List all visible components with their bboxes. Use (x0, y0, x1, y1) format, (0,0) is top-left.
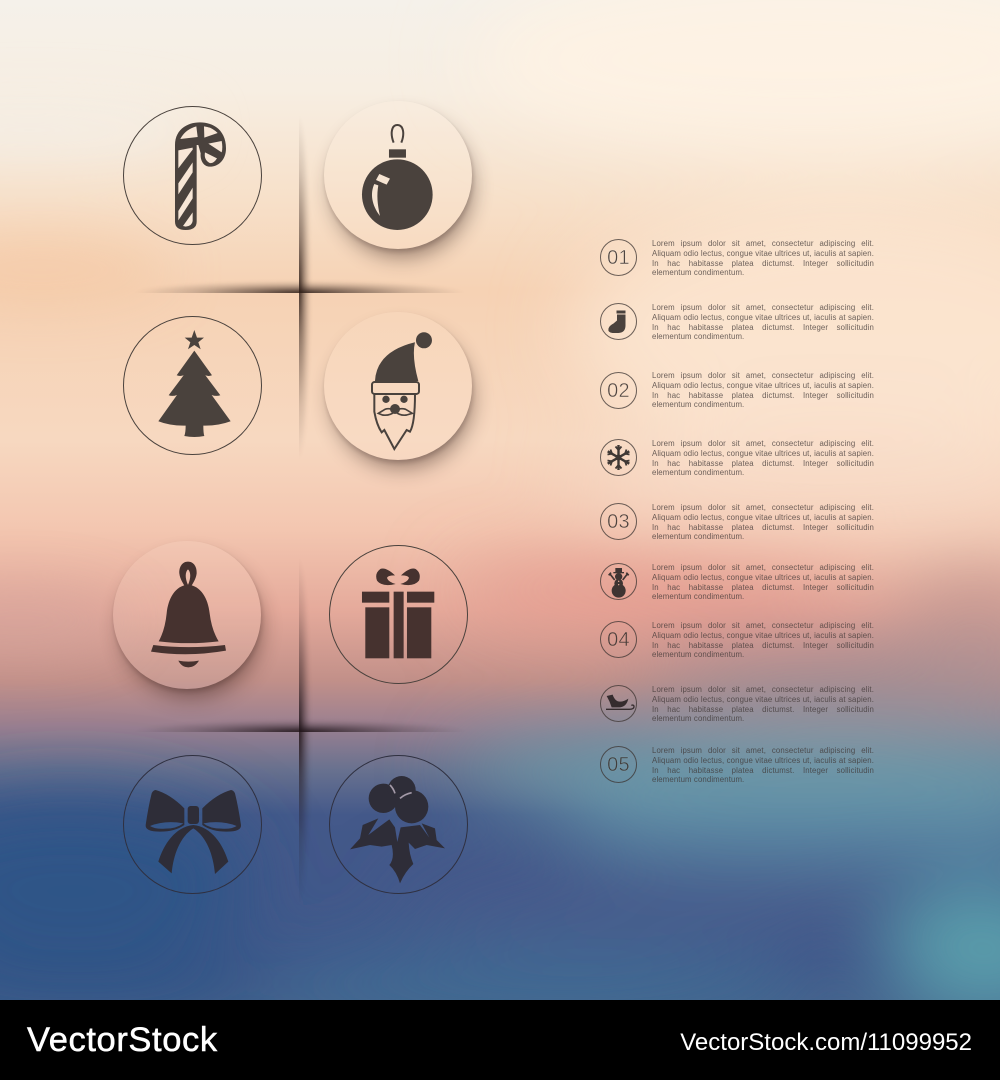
text 9: Lorem ipsum dolor sit amet, consectetur adipiscing elit. (652, 746, 874, 755)
text 5: elementum condimentum. (652, 532, 744, 541)
text 6: In hac habitasse platea dictumst. Integer sollicitudin (652, 583, 874, 592)
badge 01: 01 (607, 247, 630, 269)
text 5: Lorem ipsum dolor sit amet, consectetur adipiscing elit. (652, 503, 874, 512)
badge 04 (600, 621, 637, 658)
text 4: Aliquam odio lectus, congue vitae ultrices ut, iaculis at sapien. (652, 449, 874, 458)
badge: sock (600, 303, 637, 340)
badge 03 (600, 503, 637, 540)
text 8: Lorem ipsum dolor sit amet, consectetur adipiscing elit. (652, 685, 874, 694)
text 6: Lorem ipsum dolor sit amet, consectetur adipiscing elit. (652, 563, 874, 572)
text 4: elementum condimentum. (652, 468, 744, 477)
text 4: Lorem ipsum dolor sit amet, consectetur adipiscing elit. (652, 439, 874, 448)
badge 01 (600, 239, 637, 276)
text 9 (652, 746, 874, 784)
icon: bauble (362, 125, 433, 230)
icon: candy cane (175, 122, 226, 230)
icon: christmas tree (158, 330, 231, 437)
badge 04: 04 (607, 629, 630, 651)
text 2: Aliquam odio lectus, congue vitae ultrices ut, iaculis at sapien. (652, 313, 874, 322)
circle: santa (324, 312, 472, 460)
circle: bell (113, 541, 261, 689)
text 4: In hac habitasse platea dictumst. Integer sollicitudin (652, 459, 874, 468)
text 7: Aliquam odio lectus, congue vitae ultrices ut, iaculis at sapien. (652, 631, 874, 640)
text 2 (652, 303, 874, 341)
icon: gift (362, 592, 434, 658)
badge 05: 05 (607, 754, 630, 776)
fold: top vertical (299, 130, 310, 446)
circle: holly (329, 755, 468, 894)
text 1: elementum condimentum. (652, 268, 744, 277)
badge: snowflake (600, 439, 637, 476)
image id url: VectorStock.com/11099952 (680, 1029, 972, 1056)
text 2: Lorem ipsum dolor sit amet, consectetur adipiscing elit. (652, 303, 874, 312)
text 3 (652, 371, 874, 409)
text 6: elementum condimentum. (652, 592, 744, 601)
icon: holly (350, 776, 445, 883)
text 1: Aliquam odio lectus, congue vitae ultrices ut, iaculis at sapien. (652, 249, 874, 258)
text 5: Aliquam odio lectus, congue vitae ultrices ut, iaculis at sapien. (652, 513, 874, 522)
text 6 (652, 563, 874, 601)
icon: santa hat (375, 332, 432, 381)
logo text: VectorStock (27, 1021, 218, 1059)
text 8: Aliquam odio lectus, congue vitae ultrices ut, iaculis at sapien. (652, 695, 874, 704)
circle: bow (123, 755, 262, 894)
text 9: elementum condimentum. (652, 775, 744, 784)
text 3: In hac habitasse platea dictumst. Integer sollicitudin (652, 391, 874, 400)
circle: bauble (324, 101, 472, 249)
text 2: In hac habitasse platea dictumst. Integer sollicitudin (652, 323, 874, 332)
text 5 (652, 503, 874, 541)
text 3: elementum condimentum. (652, 400, 744, 409)
text 1: Lorem ipsum dolor sit amet, consectetur adipiscing elit. (652, 239, 874, 248)
text 9: Aliquam odio lectus, congue vitae ultrices ut, iaculis at sapien. (652, 756, 874, 765)
text 6: Aliquam odio lectus, congue vitae ultrices ut, iaculis at sapien. (652, 573, 874, 582)
text 7: elementum condimentum. (652, 650, 744, 659)
text 7: In hac habitasse platea dictumst. Integer sollicitudin (652, 641, 874, 650)
icon: bow (146, 790, 241, 874)
text 8: In hac habitasse platea dictumst. Integer sollicitudin (652, 705, 874, 714)
fold: bottom horizontal (155, 721, 446, 732)
badge 05 (600, 746, 637, 783)
circle: candy cane (123, 106, 262, 245)
badge 02 (600, 372, 637, 409)
text 3: Lorem ipsum dolor sit amet, consectetur adipiscing elit. (652, 371, 874, 380)
text 5: In hac habitasse platea dictumst. Integer sollicitudin (652, 523, 874, 532)
icon: santa face (372, 382, 419, 449)
text 1: In hac habitasse platea dictumst. Integer sollicitudin (652, 259, 874, 268)
icon: bell (151, 562, 226, 667)
text 7: Lorem ipsum dolor sit amet, consectetur adipiscing elit. (652, 621, 874, 630)
text 8 (652, 685, 874, 723)
text 4 (652, 439, 874, 477)
badge: sleigh (600, 685, 637, 722)
circle: tree (123, 316, 262, 455)
text 9: In hac habitasse platea dictumst. Integer sollicitudin (652, 766, 874, 775)
text 8: elementum condimentum. (652, 714, 744, 723)
fold: bottom vertical (299, 572, 310, 879)
text 7 (652, 621, 874, 659)
icon: gift bow (376, 569, 420, 585)
text 3: Aliquam odio lectus, congue vitae ultrices ut, iaculis at sapien. (652, 381, 874, 390)
text 1 (652, 239, 874, 277)
badge 02: 02 (607, 380, 630, 402)
badge: snowman (600, 563, 637, 600)
fold: top horizontal (148, 282, 452, 293)
footer watermark bar (0, 1000, 1000, 1080)
text 2: elementum condimentum. (652, 332, 744, 341)
circle: gift (329, 545, 468, 684)
badge 03: 03 (607, 511, 630, 533)
